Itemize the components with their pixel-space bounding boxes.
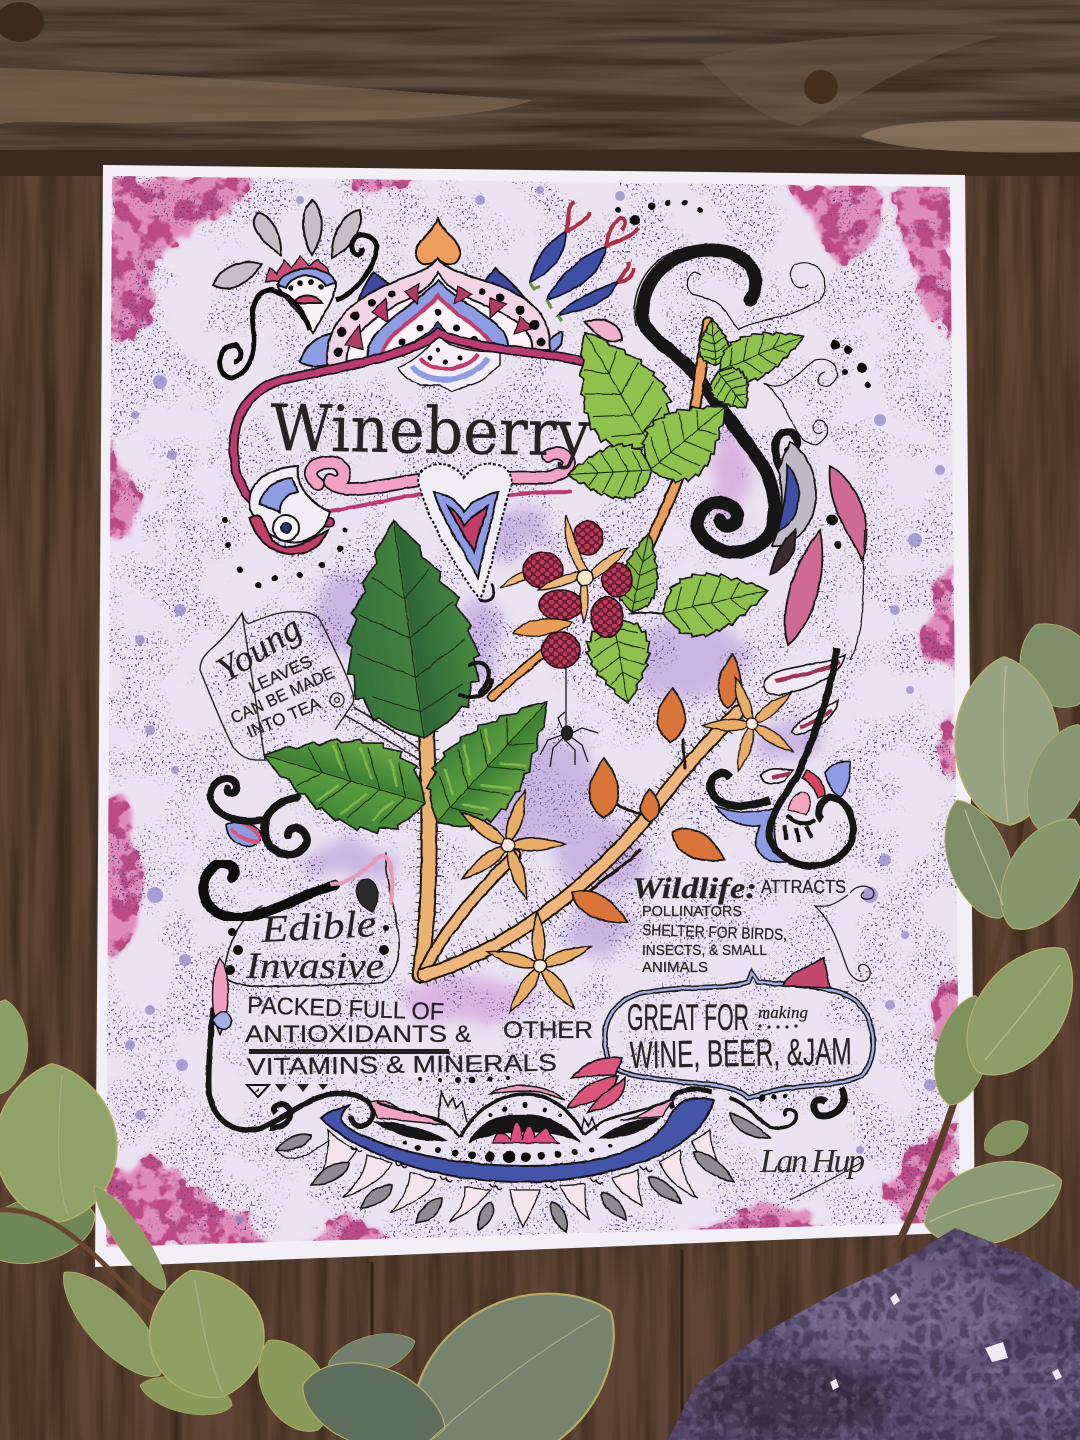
callout: great for: GREAT FOR xyxy=(627,997,749,1038)
text: wildlife xyxy=(632,872,874,981)
icon: orange flame xyxy=(416,217,460,264)
purple washes xyxy=(305,430,820,1024)
raspberry fruit cluster xyxy=(500,515,632,668)
swirls around fan xyxy=(220,290,310,378)
ornament: striped blue fan and pink leaves right xyxy=(770,442,866,660)
text: wildlife: SHELTER FOR BIRDS, xyxy=(642,922,787,944)
artwork background xyxy=(100,170,970,1260)
flourish left xyxy=(209,1010,373,1130)
flourish right xyxy=(671,1089,712,1108)
ornament: right lower swirl xyxy=(710,648,853,866)
paper print xyxy=(95,165,975,1267)
text: antioxidants: ANTIOXIDANTS xyxy=(245,1021,447,1048)
pink droplet xyxy=(585,320,622,341)
ornament: henna under banner left xyxy=(222,464,512,601)
eucalyptus branch right xyxy=(896,608,1080,1262)
bottom ornament xyxy=(209,958,844,1232)
ornament: top henna dome xyxy=(300,217,563,392)
callout: young leaves: Young xyxy=(209,607,308,690)
title banner xyxy=(234,333,585,523)
star flowers xyxy=(441,655,821,1019)
big black S-curve flourish xyxy=(634,248,871,552)
text: antioxidants: OTHER xyxy=(503,1017,593,1044)
callout: young leaves: CAN BE MADE xyxy=(228,663,337,728)
paint speckles xyxy=(100,170,970,1260)
under-band petals xyxy=(320,1130,725,1227)
text: antioxidants: VITAMINS & MINERALS xyxy=(247,1050,557,1081)
henna under banner centre xyxy=(418,464,512,600)
sepals xyxy=(500,515,628,636)
leaves: dark compound leaf xyxy=(251,512,578,851)
icon: small henna fan at left xyxy=(213,200,622,378)
callout: great for xyxy=(605,973,873,1098)
orange buds xyxy=(567,653,744,933)
callout: young leaves: LEAVES xyxy=(246,652,315,698)
stems xyxy=(420,322,738,975)
blue crescent band xyxy=(321,1098,714,1182)
signature: Lan Hup xyxy=(759,1143,865,1180)
teardrops xyxy=(276,1134,734,1232)
amethyst crystal xyxy=(660,1220,1080,1440)
callout: edible invasive: Edible xyxy=(259,903,377,951)
text: antioxidants: PACKED FULL OF xyxy=(247,992,445,1026)
icons: pink leaves xyxy=(568,958,830,1112)
callout: young leaves xyxy=(200,607,354,760)
callout: great for: making xyxy=(758,1003,808,1022)
icon: spider xyxy=(540,668,598,767)
text: wildlife: Wildlife: xyxy=(632,872,757,905)
signature xyxy=(759,1143,865,1200)
dome xyxy=(370,1100,673,1125)
ornament: left swirl cluster xyxy=(210,663,492,854)
callout: edible invasive: Invasive xyxy=(245,946,384,987)
banner ribbon upper xyxy=(234,333,585,523)
text: wildlife: INSECTS, & SMALL xyxy=(642,942,767,959)
title: Wineberry: Wineberry xyxy=(270,392,591,472)
henna medallion below banner xyxy=(398,335,500,392)
pink watercolor corners xyxy=(105,176,960,1247)
callout: great for: WINE, BEER, &JAM xyxy=(629,1031,852,1077)
text: wildlife: ANIMALS xyxy=(642,959,708,976)
berries xyxy=(523,521,632,668)
text: wildlife: POLLINATORS xyxy=(642,903,742,920)
thorn hairs xyxy=(420,712,738,975)
icon: blue bell flowers xyxy=(530,200,703,321)
callout: edible invasive xyxy=(203,852,399,987)
text: antioxidants xyxy=(245,992,593,1097)
banner ribbon lower xyxy=(311,453,568,497)
text: wildlife: ATTRACTS xyxy=(761,877,846,897)
text: antioxidants: & xyxy=(455,1021,471,1048)
callout: young leaves: INTO TEA xyxy=(244,693,324,742)
eucalyptus branch bottom left xyxy=(0,997,654,1440)
leaves: light green branch leaves xyxy=(548,311,812,708)
icon: teardrops xyxy=(213,200,361,288)
